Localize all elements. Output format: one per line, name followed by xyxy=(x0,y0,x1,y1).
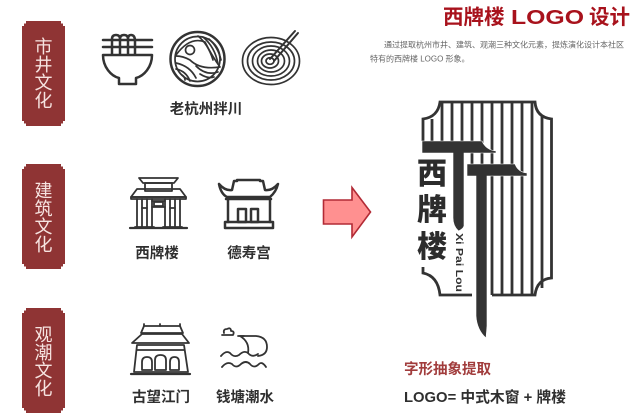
description text: 通过提取杭州市井、建筑、观潮三种文化元素，提炼演化设计本社区 xyxy=(384,40,624,50)
logo: 西牌楼 characters: 楼 xyxy=(417,231,447,264)
description text xyxy=(370,40,624,64)
arrow xyxy=(324,188,370,237)
icon: noodle bowl top view xyxy=(170,32,224,86)
icon: 德寿宫 hall xyxy=(219,180,278,228)
label: 古望江门: 古望江门 xyxy=(132,388,190,406)
banner: 观潮文化: 文 xyxy=(34,361,52,381)
banner: 市井文化 xyxy=(22,21,65,126)
icon: 西牌楼 gate xyxy=(130,178,187,228)
label: 老杭州拌川: 老杭州拌川 xyxy=(170,100,242,118)
banner: 市井文化: 化 xyxy=(34,91,52,111)
logo: Xi Pai Lou: Xi Pai Lou xyxy=(453,233,465,292)
title: 西牌楼 xyxy=(443,6,505,29)
description text: 特有的西牌楼 LOGO 形象。 xyxy=(370,54,470,64)
label: 西牌楼: 西牌楼 xyxy=(135,244,179,262)
banner: 观潮文化: 化 xyxy=(34,379,52,399)
caption: 字形抽象提取: 字形抽象提取 xyxy=(404,360,491,378)
icon: 古望江门 city gate xyxy=(131,324,190,374)
formula: LOGO = 中式木窗 + 牌楼: LOGO= 中式木窗 + 牌楼 xyxy=(404,388,566,406)
icon: spiral noodles with chopsticks xyxy=(242,31,300,84)
logo: 西牌楼 characters: 牌 xyxy=(417,194,447,227)
title: 设计 xyxy=(589,6,630,29)
icon: 钱塘潮水 tide xyxy=(221,328,267,367)
banner: 观潮文化: 潮 xyxy=(34,343,52,363)
logo: 西牌楼 characters xyxy=(417,158,447,264)
label: 德寿宫: 德寿宫 xyxy=(227,244,271,262)
logo: window frame and paifang xyxy=(417,102,552,338)
banner: 市井文化: 市 xyxy=(34,37,52,57)
label: 钱塘潮水: 钱塘潮水 xyxy=(216,388,274,406)
banner: 市井文化: 井 xyxy=(34,55,52,75)
banner: 市井文化: 文 xyxy=(34,73,52,93)
logo: upper paifang T xyxy=(422,141,496,231)
logo: lower paifang T xyxy=(467,164,527,338)
logo: 西牌楼 characters: 西 xyxy=(417,158,447,191)
title xyxy=(443,6,630,29)
banner: 建筑文化: 筑 xyxy=(34,199,52,219)
banner: 建筑文化 xyxy=(22,164,65,269)
title: LOGO xyxy=(511,6,584,29)
banner: 建筑文化: 建 xyxy=(34,181,52,201)
banner: 观潮文化: 观 xyxy=(34,325,52,345)
banner: 建筑文化: 化 xyxy=(34,235,52,255)
banner: 建筑文化: 文 xyxy=(34,217,52,237)
logo: window lattice xyxy=(423,102,552,295)
icon: noodle bowl xyxy=(103,35,152,84)
banner: 观潮文化 xyxy=(22,308,65,413)
